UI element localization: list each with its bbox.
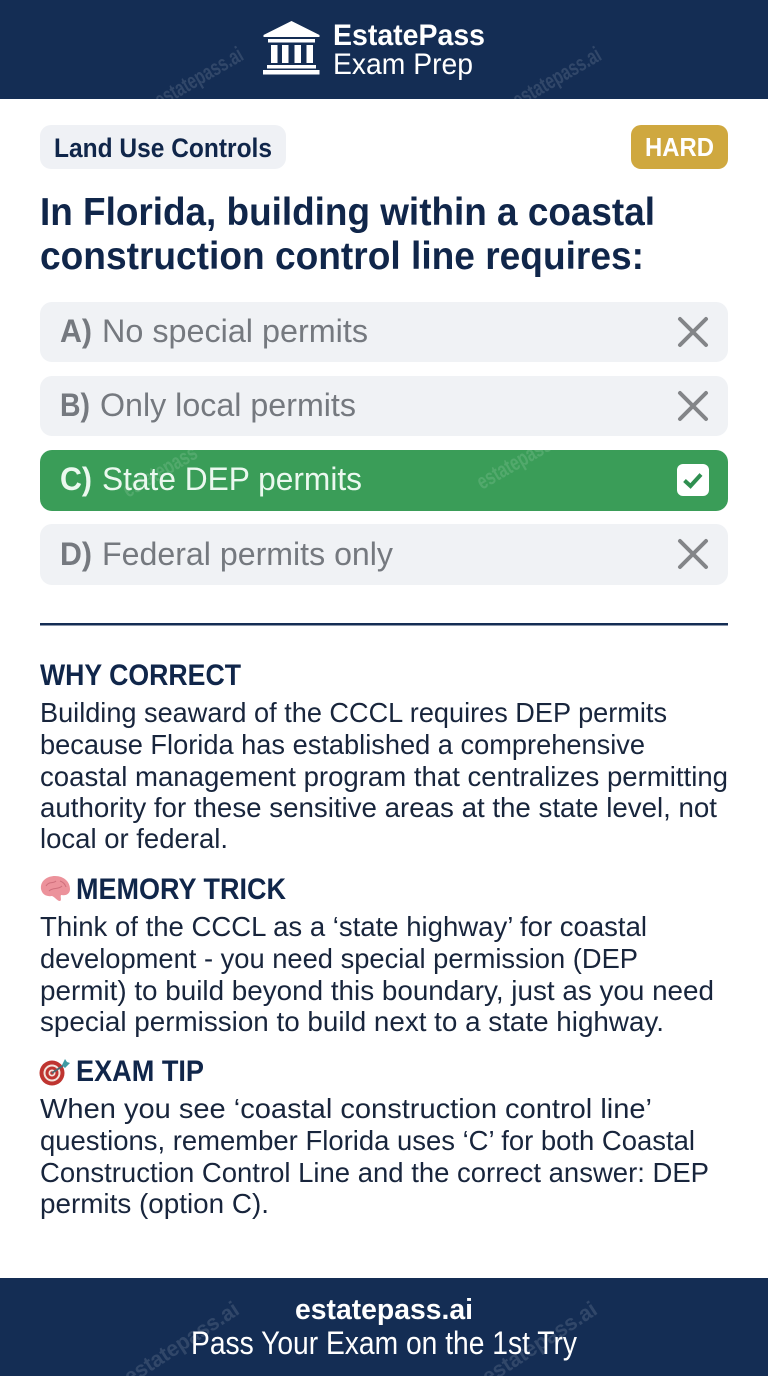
footer bar xyxy=(0,1278,768,1376)
option A xyxy=(40,302,728,362)
footer website: estatepass.ai xyxy=(295,1294,473,1326)
option A: A) xyxy=(60,313,92,349)
option C correct answer: estatepass xyxy=(472,432,556,494)
option C correct answer: State DEP permits xyxy=(102,461,362,497)
text: memory trick explanation xyxy=(40,911,714,1037)
question heading: In Florida, building within a coastal xyxy=(40,191,655,234)
section: why correct xyxy=(40,659,728,854)
icon: classical building logo xyxy=(263,21,320,74)
option D: D) xyxy=(60,536,92,572)
option B xyxy=(40,376,728,436)
text: why correct explanation: local or federal. xyxy=(40,823,228,854)
option A: No special permits xyxy=(102,313,368,349)
text: why correct explanation: because Florida has established a comprehensive xyxy=(40,729,645,760)
text: why correct explanation: coastal management program that centralizes permitting xyxy=(40,761,728,792)
text: memory trick explanation: special permission to build next to a state highway. xyxy=(40,1006,664,1037)
icon: check box xyxy=(677,464,709,496)
footer tagline: Pass Your Exam on the 1st Try xyxy=(191,1325,577,1361)
brand name xyxy=(333,19,485,81)
text: why correct explanation: Building seaward of the CCCL requires DEP permits xyxy=(40,697,667,728)
option D xyxy=(40,524,728,585)
heading: exam tip: EXAM TIP xyxy=(76,1055,204,1088)
option C correct answer: C) xyxy=(60,461,92,497)
text: exam tip explanation: permits (option C). xyxy=(40,1188,269,1219)
text: memory trick explanation: Think of the CCCL as a ‘state highway’ for coastal xyxy=(40,911,647,942)
header bar: estatepass.ai xyxy=(508,42,605,112)
icon: brain xyxy=(41,876,70,901)
section: memory trick xyxy=(40,873,714,1037)
text: exam tip explanation: Construction Control Line and the correct answer: DEP xyxy=(40,1157,709,1188)
text: memory trick explanation: permit) to build beyond this boundary, just as you need xyxy=(40,975,714,1006)
question heading xyxy=(40,191,655,278)
category tag: Land Use Controls xyxy=(54,133,272,163)
text: exam tip explanation xyxy=(40,1093,709,1219)
text: why correct explanation xyxy=(40,697,728,854)
option C correct answer: estatepass xyxy=(118,440,202,502)
header bar: estatepass.ai xyxy=(150,42,247,112)
header bar xyxy=(0,0,768,112)
option D: Federal permits only xyxy=(102,536,394,572)
category tag xyxy=(40,125,286,169)
icon: cross D xyxy=(680,541,706,567)
difficulty badge: HARD xyxy=(645,134,714,162)
question heading: construction control line requires: xyxy=(40,235,644,278)
brand name: EstatePass xyxy=(333,19,485,52)
option C correct answer xyxy=(40,432,728,511)
difficulty badge xyxy=(631,125,728,169)
text: why correct explanation: authority for these sensitive areas at the state level, not xyxy=(40,792,717,823)
icon: cross B xyxy=(680,393,706,419)
text: memory trick explanation: development - you need special permission (DEP xyxy=(40,943,638,974)
icon: cross A xyxy=(680,319,706,345)
heading: memory trick: MEMORY TRICK xyxy=(76,873,287,906)
brand name: Exam Prep xyxy=(333,48,473,81)
text: exam tip explanation: questions, remember Florida uses ‘C’ for both Coastal xyxy=(40,1125,695,1156)
section: exam tip xyxy=(40,1055,709,1219)
option B: B) xyxy=(60,387,90,423)
option B: Only local permits xyxy=(100,387,356,423)
text: exam tip explanation: When you see ‘coastal construction control line’ xyxy=(40,1093,652,1124)
icon: target with dart xyxy=(40,1059,70,1086)
heading: why correct: WHY CORRECT xyxy=(40,659,241,692)
